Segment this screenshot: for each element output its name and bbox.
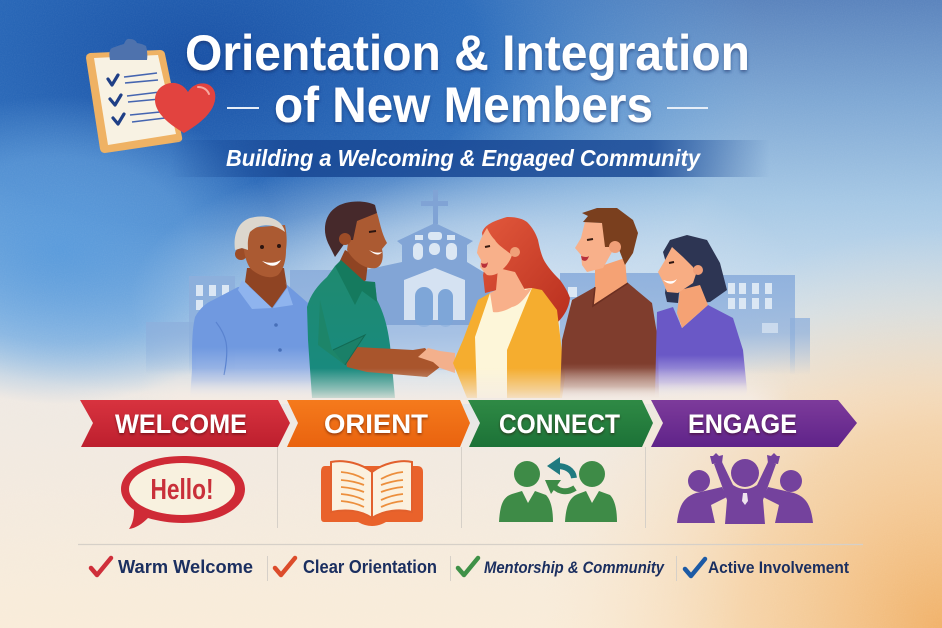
title: Orientation & Integration <box>185 25 750 81</box>
benefit: mentorship and community: Mentorship & Community <box>484 558 665 577</box>
icon: hello speech bubble: Hello! <box>150 474 214 506</box>
icon: hello speech bubble <box>121 456 245 529</box>
title dashes <box>227 107 708 109</box>
icon: open book <box>321 461 423 526</box>
step banner: engage <box>651 400 857 447</box>
church <box>365 190 490 370</box>
step banner: connect <box>468 400 653 447</box>
benefit: clear orientation: Clear Orientation <box>303 557 437 577</box>
benefit: warm welcome: Warm Welcome <box>118 557 253 577</box>
icon: red heart <box>155 83 215 133</box>
icon: group with raised arms <box>677 453 813 524</box>
step banner: welcome <box>80 400 290 447</box>
icon: clipboard with checklist <box>86 39 215 153</box>
title <box>185 25 750 133</box>
title: of New Members <box>274 77 653 133</box>
step banner: connect: CONNECT <box>499 409 620 439</box>
illustration: five people greeting <box>190 202 747 398</box>
lower fade over people <box>190 370 773 404</box>
step banner: engage: ENGAGE <box>688 409 797 439</box>
person: older man in blue shirt <box>190 217 314 398</box>
step banner: orient: ORIENT <box>324 409 429 439</box>
person: man in brown sweater <box>560 208 659 398</box>
illustration: church and city skyline <box>146 190 810 375</box>
step banner: welcome: WELCOME <box>115 409 247 439</box>
column dividers <box>78 447 863 581</box>
subtitle band <box>170 140 770 177</box>
handshake lower fingers <box>410 362 430 377</box>
person: woman in purple top <box>655 235 747 396</box>
icon: two people connecting <box>499 457 617 522</box>
subtitle band: Building a Welcoming & Engaged Community <box>226 145 701 171</box>
step banner: orient <box>287 400 470 447</box>
person: woman with red hair and yellow cardigan <box>453 217 570 398</box>
person: man in green shirt shaking hands <box>307 202 455 398</box>
benefit: active involvement: Active Involvement <box>708 558 849 577</box>
